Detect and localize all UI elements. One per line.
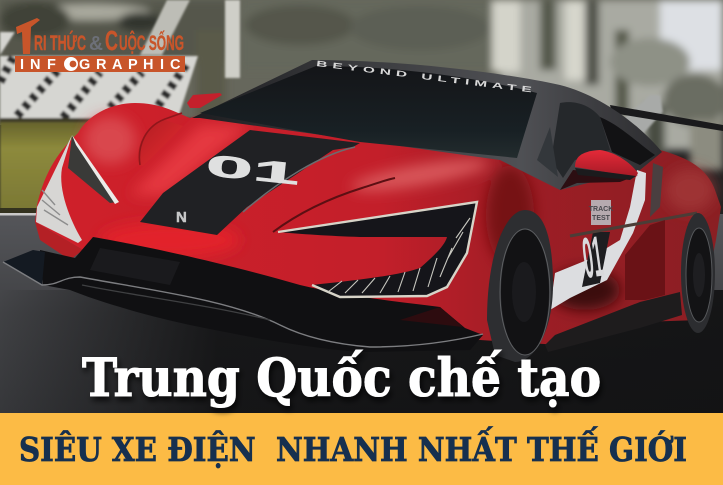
car: red body shell: [35, 75, 721, 345]
car: hood accent line: [243, 147, 355, 212]
logo: wordmark Tri thức: RI THỨC: [34, 31, 86, 55]
logo: large T mark: [16, 18, 40, 54]
car: windshield: [200, 59, 537, 158]
car: door dark stripe: [650, 163, 663, 217]
car: hood number 01: 01: [204, 149, 301, 192]
yellow title band: [0, 413, 723, 485]
car: left headlight: [36, 135, 119, 243]
car: lower grille and front splitter: [3, 237, 483, 352]
logo: wordmark C initial: C: [105, 25, 118, 56]
car: rear side intake: [625, 220, 665, 300]
car: rear wing: [610, 95, 723, 135]
car: front lip red corner: [35, 222, 83, 260]
car: rear wheel: [681, 213, 715, 333]
car: wing mirror: [560, 150, 638, 190]
car: side windows: [537, 102, 655, 178]
car: door track test decal: [589, 200, 613, 225]
background: checkered track barrier: [0, 0, 240, 124]
publisher logo: [15, 18, 185, 73]
main title: Trung Quốc chế tạo: [82, 348, 601, 409]
logo: wordmark Cuộc sống: UỘC SỐNG: [119, 31, 184, 55]
car: door number plate 01: 01: [579, 226, 607, 291]
car: left wing mirror: [187, 93, 222, 108]
car: side blade: [570, 213, 697, 236]
car: hood black stripe: [140, 130, 360, 235]
car: hood crease: [273, 178, 395, 232]
background: grass verge: [0, 122, 90, 210]
car: supercar illustration: [3, 59, 721, 362]
car: front wheel: [487, 210, 553, 362]
car: right headlight: [278, 202, 477, 297]
car: door track test decal: TRACK: [589, 206, 613, 213]
car: lower red intake dark triangle: [400, 307, 463, 327]
car: roof and pillars: [192, 60, 662, 190]
car: side skirt: [545, 292, 682, 352]
logo: infographic ribbon: INFOGRAPHIC: [20, 57, 181, 73]
car: door track test decal: TEST: [592, 215, 611, 222]
car: windshield banner text: BEYOND ULTIMATE: [316, 59, 537, 95]
car: fender and hood highlights: [84, 116, 715, 310]
background: asphalt road: [0, 208, 723, 414]
car: fender vent: [138, 113, 183, 166]
logo: ampersand: &: [89, 33, 103, 55]
car: hood badge: N: [176, 209, 187, 226]
car: door white race stripe: [550, 170, 646, 310]
background: blurred race track scenery: [0, 0, 723, 170]
